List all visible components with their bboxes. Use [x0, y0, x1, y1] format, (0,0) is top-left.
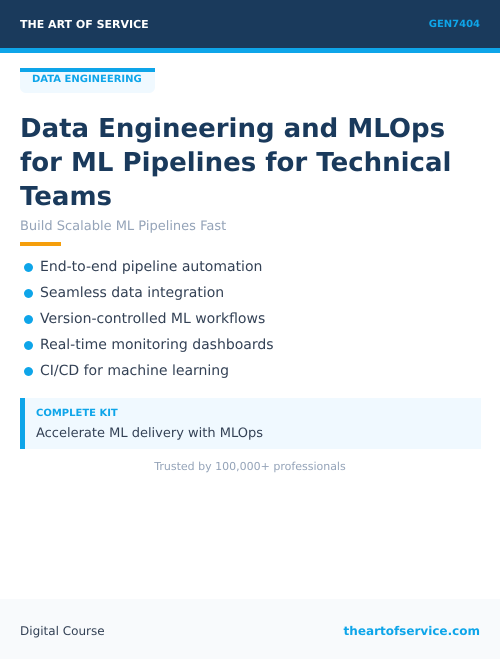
- feature 4: Real-time monitoring dashboards: [40, 337, 274, 353]
- feature 1: End-to-end pipeline automation: [40, 259, 262, 275]
- title: Data Engineering and MLOps for ML Pipelines for Technical Teams: [20, 114, 451, 212]
- footer: [0, 599, 500, 659]
- website: theartofservice.com: [344, 624, 480, 638]
- brand name: THE ART OF SERVICE: [20, 18, 149, 31]
- feature 2: Seamless data integration: [40, 285, 224, 301]
- header bar: [0, 0, 500, 53]
- feature list: [24, 259, 274, 379]
- bullet 1: [24, 263, 33, 272]
- product code: GEN7404: [429, 19, 480, 30]
- callout text: Accelerate ML delivery with MLOps: [36, 426, 263, 441]
- category badge: [20, 68, 155, 93]
- feature 5: CI/CD for machine learning: [40, 363, 229, 379]
- badge label: DATA ENGINEERING: [32, 74, 142, 85]
- trust line: Trusted by 100,000+ professionals: [154, 460, 346, 473]
- callout label: COMPLETE KIT: [36, 408, 118, 419]
- bullet 2: [24, 289, 33, 298]
- bullet 4: [24, 341, 33, 350]
- subtitle: Build Scalable ML Pipelines Fast: [20, 219, 226, 234]
- feature 3: Version-controlled ML workflows: [40, 311, 265, 327]
- bullet 5: [24, 367, 33, 376]
- course type: Digital Course: [20, 624, 105, 638]
- accent rule: [20, 242, 61, 246]
- bullet 3: [24, 315, 33, 324]
- callout panel: [20, 398, 481, 449]
